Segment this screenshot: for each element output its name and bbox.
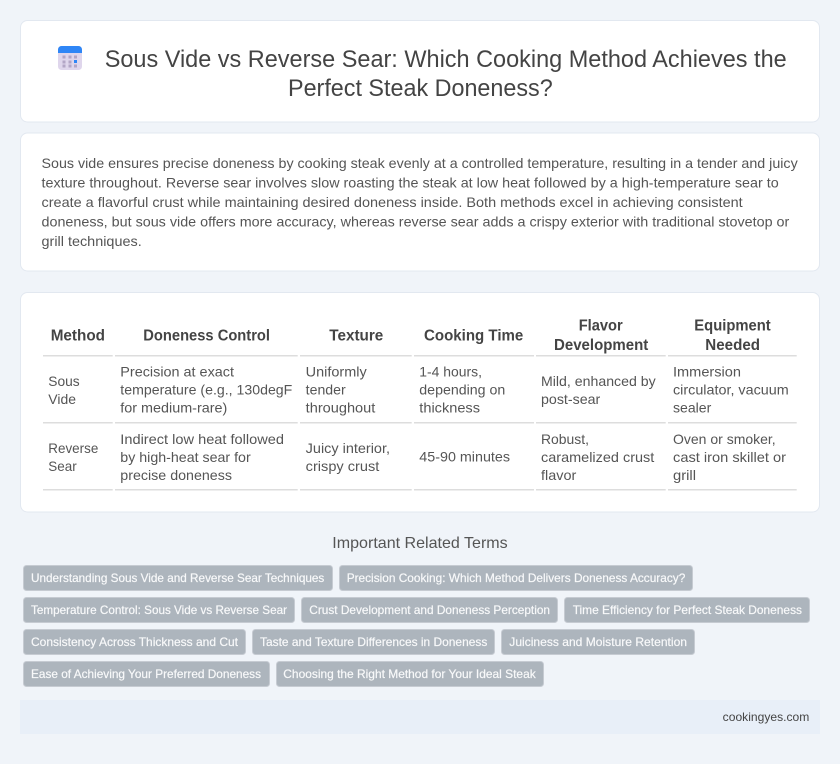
tag: Precision Cooking: Which Method Delivers Doneness Accuracy? bbox=[347, 571, 686, 585]
tag bbox=[24, 598, 294, 622]
table header row: Method bbox=[51, 328, 105, 345]
table row: Reverse Sear: crispy crust bbox=[306, 458, 379, 474]
table row: Reverse Sear: by high-heat sear for bbox=[120, 449, 251, 465]
tag: Time Efficiency for Perfect Steak Doneness bbox=[573, 603, 802, 617]
table row: Sous Vide: post-sear bbox=[541, 391, 601, 407]
tag: Ease of Achieving Your Preferred Doneness bbox=[31, 667, 261, 681]
related term tags bbox=[24, 566, 810, 686]
tag bbox=[340, 566, 692, 590]
table row: Sous Vide: Uniformly bbox=[306, 364, 367, 380]
footer: cookingyes.com bbox=[723, 710, 809, 724]
table row: Sous Vide: temperature (e.g., 130degF bbox=[120, 382, 292, 398]
table row: Reverse Sear: Juicy interior, bbox=[306, 440, 390, 456]
table header row: Doneness Control bbox=[143, 328, 270, 345]
summary text: texture throughout. Reverse sear involves slow roasting the steak at low heat followed by a high-temperature sear to bbox=[42, 174, 779, 190]
tag bbox=[502, 630, 694, 654]
table row: Sous Vide: tender bbox=[306, 382, 346, 398]
tag: Temperature Control: Sous Vide vs Reverse Sear bbox=[31, 603, 287, 617]
summary text: grill techniques. bbox=[42, 233, 142, 249]
table row: Reverse Sear: Oven or smoker, bbox=[673, 431, 776, 447]
table row: Reverse Sear: Robust, bbox=[541, 431, 589, 447]
footer bbox=[20, 700, 820, 734]
table header row: Flavor bbox=[579, 318, 623, 335]
table row: Reverse Sear: Sear bbox=[48, 458, 77, 474]
tag bbox=[24, 566, 332, 590]
table row: Reverse Sear: grill bbox=[673, 467, 696, 483]
tag bbox=[24, 630, 246, 654]
tag: Understanding Sous Vide and Reverse Sear Techniques bbox=[31, 571, 324, 585]
title: Perfect Steak Doneness? bbox=[288, 75, 553, 102]
tag bbox=[252, 630, 494, 654]
table row: Reverse Sear: flavor bbox=[541, 467, 577, 483]
table row: Reverse Sear: precise doneness bbox=[120, 467, 232, 483]
table header row: Equipment bbox=[694, 318, 771, 335]
table row: Sous Vide: sealer bbox=[673, 400, 712, 416]
summary text bbox=[42, 155, 798, 249]
table row: Sous Vide: Mild, enhanced by bbox=[541, 373, 656, 389]
heading: related terms: Important Related Terms bbox=[332, 535, 508, 552]
summary text: create a flavorful crust while maintaining desired doneness inside. Both methods excel in achieving consistent bbox=[42, 194, 743, 210]
tag bbox=[564, 598, 810, 622]
table row: Sous Vide: circulator, vacuum bbox=[673, 382, 789, 398]
tag: Choosing the Right Method for Your Ideal Steak bbox=[283, 667, 537, 681]
table row: Sous Vide: Immersion bbox=[673, 364, 741, 380]
tag: Consistency Across Thickness and Cut bbox=[31, 635, 239, 649]
table header row: Texture bbox=[329, 328, 383, 345]
table row: Sous Vide: thickness bbox=[419, 400, 480, 416]
title bbox=[105, 46, 787, 102]
table header row: Development bbox=[554, 337, 649, 354]
summary text: Sous vide ensures precise doneness by cooking steak evenly at a controlled temperature, resulting in a tender and juicy bbox=[42, 155, 798, 171]
table row: Sous Vide: throughout bbox=[306, 400, 375, 416]
table row: Sous Vide: Vide bbox=[48, 391, 76, 407]
tag: Crust Development and Doneness Perception bbox=[309, 603, 550, 617]
table header row: Needed bbox=[705, 337, 760, 354]
table row: Reverse Sear: Indirect low heat followed bbox=[120, 431, 284, 447]
table row: Reverse Sear: 45-90 minutes bbox=[419, 449, 510, 465]
title: Sous Vide vs Reverse Sear: Which Cooking Method Achieves the bbox=[105, 46, 787, 73]
table header row bbox=[51, 318, 771, 354]
table row: Reverse Sear bbox=[48, 431, 786, 483]
tag bbox=[24, 662, 270, 686]
table row: Sous Vide: Precision at exact bbox=[120, 364, 234, 380]
panel: title card bbox=[20, 20, 820, 122]
table header row: Cooking Time bbox=[424, 328, 523, 345]
table row: Sous Vide: 1-4 hours, bbox=[419, 364, 482, 380]
table row: Sous Vide: for medium-rare) bbox=[120, 400, 227, 416]
table row: Sous Vide: depending on bbox=[419, 382, 505, 398]
summary text: doneness, but sous vide offers more accuracy, whereas reverse sear adds a crispy exterior with traditional stovetop or bbox=[42, 214, 790, 230]
panel: comparison table bbox=[20, 292, 820, 512]
tag: Juiciness and Moisture Retention bbox=[509, 635, 687, 649]
table row: Reverse Sear: Reverse bbox=[48, 440, 98, 456]
table row: Reverse Sear: cast iron skillet or bbox=[673, 449, 786, 465]
tag bbox=[302, 598, 558, 622]
icon: calendar bbox=[58, 46, 82, 70]
table row: Sous Vide: Sous bbox=[48, 373, 80, 389]
tag bbox=[276, 662, 544, 686]
table row: Sous Vide bbox=[48, 364, 789, 416]
panel: summary bbox=[20, 133, 820, 271]
tag: Taste and Texture Differences in Doneness bbox=[260, 635, 487, 649]
table row: Reverse Sear: caramelized crust bbox=[541, 449, 654, 465]
